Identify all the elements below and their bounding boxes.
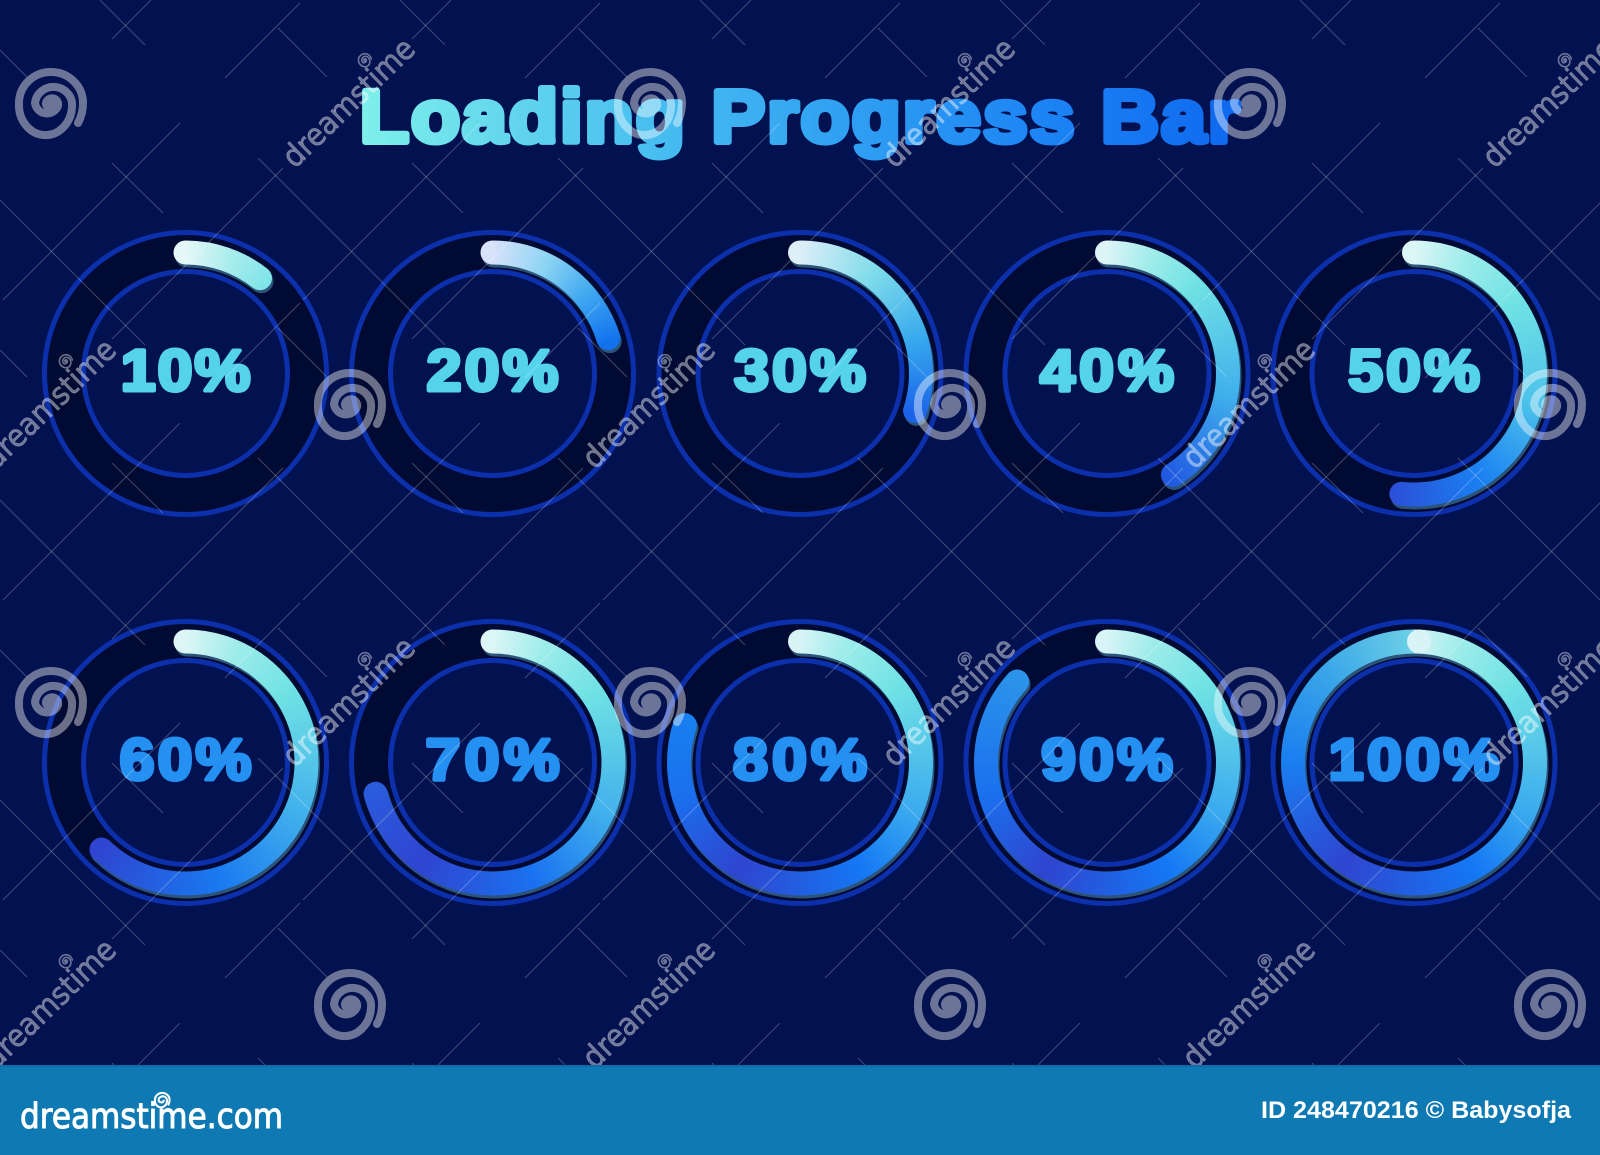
progress ring: 50%: 50% — [1348, 338, 1480, 403]
watermark: dreamstime text: dreamstime — [275, 31, 423, 175]
progress ring: 50% — [1264, 224, 1564, 524]
progress ring: 70% — [342, 612, 642, 912]
progress ring: 10% — [36, 224, 336, 524]
progress ring: 80% — [650, 612, 950, 912]
watermark: dreamstime text: dreamstime — [1175, 332, 1323, 476]
progress ring: 100% — [1264, 612, 1564, 912]
footer image credit: ID 248470216 © Babysofja — [1261, 1097, 1572, 1124]
progress ring: 20%: 20% — [427, 338, 558, 403]
progress ring: 60%: 60% — [120, 727, 251, 792]
progress ring: 70%: 70% — [426, 727, 559, 792]
footer logo text: dreamstime.com — [20, 1097, 283, 1137]
progress ring: 30% — [650, 224, 950, 524]
watermark: dreamstime text: dreamstime — [1175, 932, 1323, 1076]
progress ring: 90% — [957, 612, 1257, 912]
title: Loading Progress Bar — [360, 76, 1239, 158]
progress ring: 20% — [342, 224, 642, 524]
watermark: dreamstime text: dreamstime — [575, 332, 723, 476]
progress ring: 60% — [36, 612, 336, 912]
footer bar — [0, 1065, 1600, 1155]
watermark: dreamstime text: dreamstime — [575, 932, 723, 1076]
progress ring: 30%: 30% — [734, 338, 866, 403]
footer logo spiral — [155, 1093, 170, 1107]
progress ring: 10%: 10% — [121, 338, 250, 403]
watermark: dreamstime text: dreamstime — [275, 630, 423, 774]
watermark: dreamstime text: dreamstime — [875, 630, 1023, 774]
progress ring: 80%: 80% — [733, 727, 867, 792]
progress ring: 90%: 90% — [1041, 727, 1173, 792]
progress ring: 100%: 100% — [1329, 727, 1499, 792]
progress ring: 40% — [957, 224, 1257, 524]
watermark: dreamstime text: dreamstime — [875, 31, 1023, 175]
progress ring: 40%: 40% — [1040, 338, 1174, 403]
